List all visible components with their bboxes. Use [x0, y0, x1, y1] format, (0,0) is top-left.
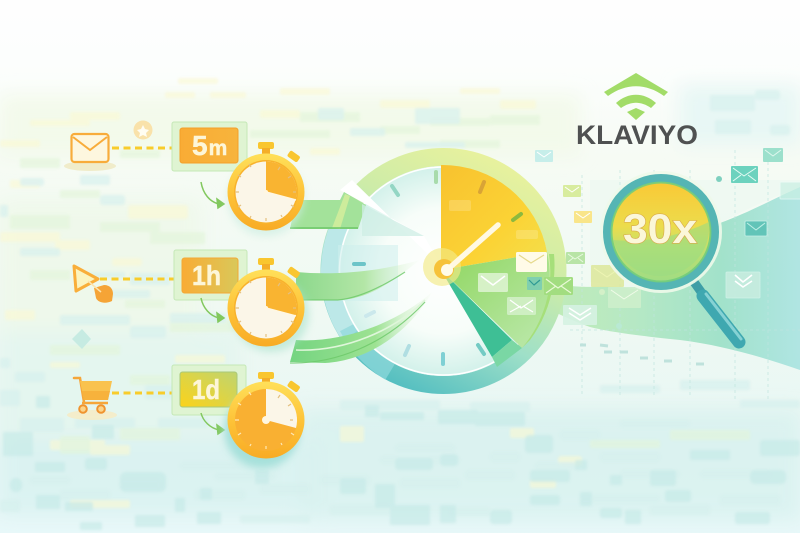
- time tag 5m: 5m: [192, 130, 227, 161]
- chart grid lines and small markers: [570, 150, 800, 400]
- row 3: cart to 1 day: [67, 365, 246, 434]
- envelope: teal mid: [745, 221, 767, 236]
- time tag 5m: [172, 122, 247, 171]
- envelope: teal small: [527, 277, 542, 290]
- row 1: email to 5 minutes: [64, 122, 247, 208]
- envelope: pale teal top: [535, 150, 553, 162]
- envelope: teal top right: [763, 148, 783, 162]
- light beam: [340, 180, 444, 270]
- stream: lower band: [290, 292, 432, 363]
- stream: top band: [290, 192, 424, 236]
- logo: [576, 73, 698, 150]
- envelope: yellow: [574, 211, 592, 223]
- icon: cursor with hand: [74, 266, 113, 303]
- magnifying glass with 30x: [600, 171, 741, 342]
- block behind left face: [338, 245, 398, 301]
- envelope: green: [544, 277, 573, 295]
- clock ticks: [354, 172, 521, 364]
- diamond decoration: [72, 329, 91, 349]
- time tag 1d: 1d: [192, 374, 220, 405]
- clock hand and pivot: [423, 225, 498, 286]
- stopwatch 1d: [224, 372, 304, 468]
- envelope: translucent white low: [563, 305, 597, 325]
- envelope: outline right: [780, 182, 800, 199]
- ring left section: [330, 204, 352, 336]
- pale highlights on wedge: [449, 200, 538, 239]
- envelope: yellowish translucent: [591, 265, 624, 287]
- dashed connector: [112, 146, 174, 150]
- envelope: translucent large right: [726, 272, 760, 298]
- green arrow: [201, 413, 224, 434]
- icon: envelope: [64, 134, 116, 171]
- stream: middle band: [296, 260, 420, 300]
- dark green wedge: [441, 270, 512, 357]
- envelope: translucent lower: [507, 297, 536, 315]
- pale area above chart: [590, 180, 800, 290]
- row 2: click to 1 hour: [74, 250, 247, 322]
- envelope: lime: [563, 185, 581, 197]
- yellow wedge: [441, 165, 547, 270]
- green arrow: [201, 182, 224, 208]
- envelope: translucent left: [478, 273, 508, 292]
- floating envelopes: [478, 148, 800, 325]
- big clock: [330, 157, 558, 385]
- handle: [694, 282, 741, 342]
- envelope: teal strong: [731, 166, 758, 183]
- envelope: translucent mid: [608, 287, 641, 308]
- icon: shopping cart: [67, 378, 117, 420]
- green wedge: [441, 252, 550, 348]
- time tag 1h: [174, 250, 247, 300]
- 30x label: 30x: [623, 205, 698, 252]
- green arrow: [201, 298, 224, 322]
- clock outer ring: [330, 157, 558, 385]
- stopwatch 1h: [228, 258, 309, 352]
- dashed connector: [100, 278, 174, 280]
- logo wordmark: KLAVIYO: [576, 120, 698, 150]
- dashed connector: [112, 392, 174, 394]
- stopwatch 5m: [228, 142, 304, 236]
- clock face: [338, 166, 548, 376]
- glass: [600, 171, 722, 293]
- logo signal icon: [604, 73, 668, 120]
- time tag 1d: [172, 365, 246, 415]
- growth flow area chart: [540, 150, 800, 400]
- gold star badge decoration: [134, 120, 152, 140]
- envelope: cream: [516, 252, 547, 272]
- time tag 1h: 1h: [192, 260, 221, 291]
- envelope: light green: [566, 252, 585, 264]
